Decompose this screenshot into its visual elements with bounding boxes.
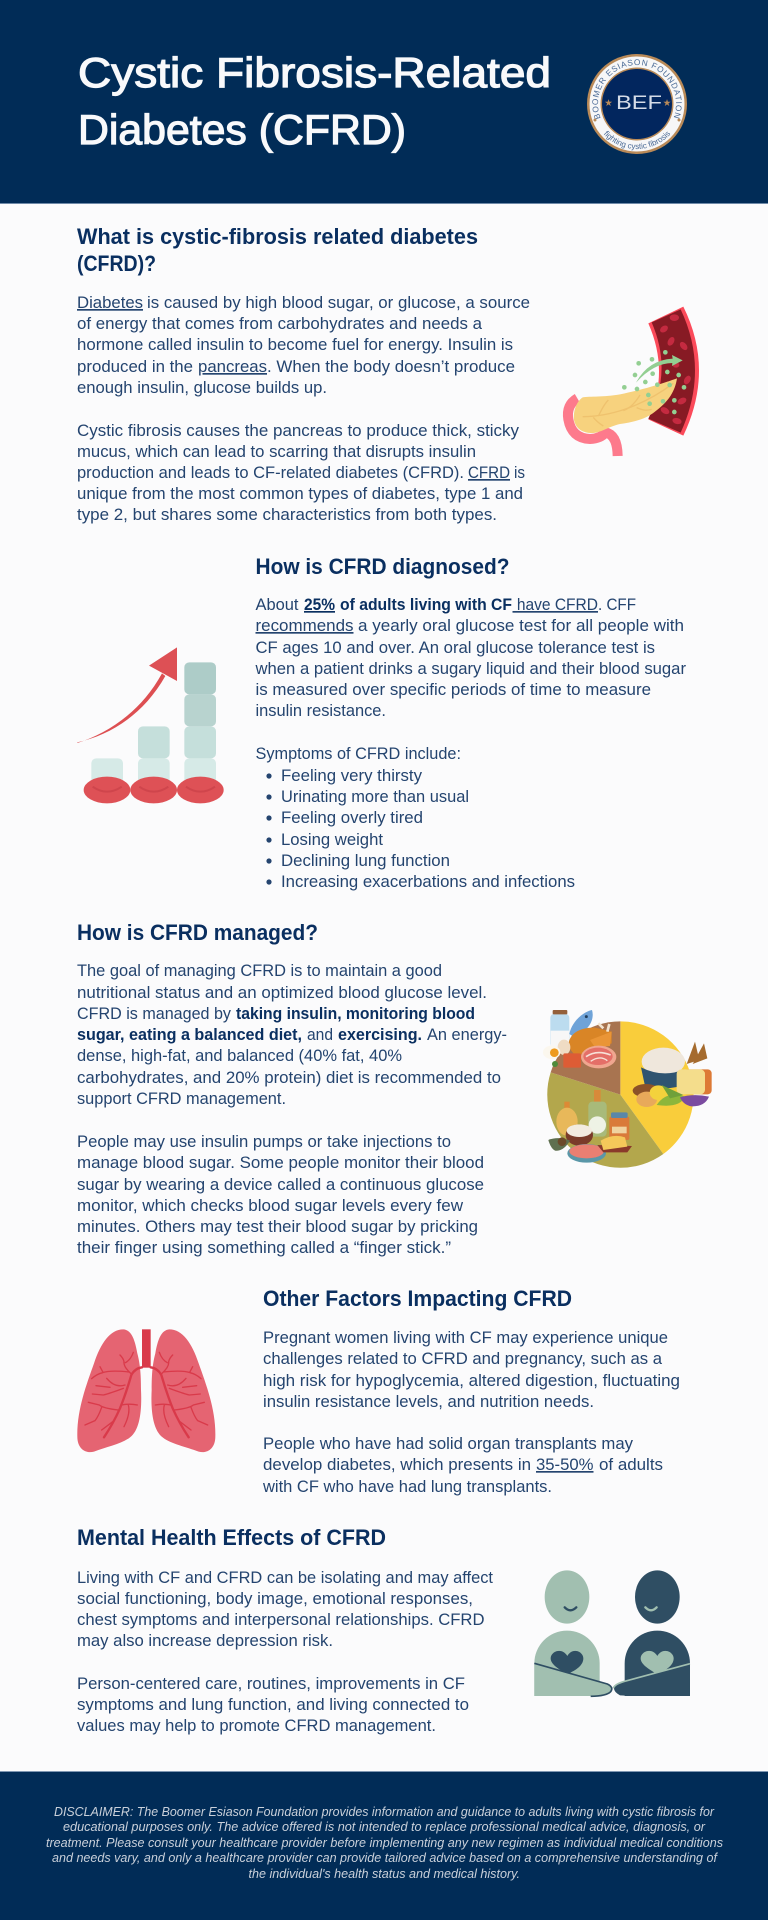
text block: what is diabetes: enough insulin, glucose builds up. [77, 378, 327, 397]
text block: managing CFRD: exercising. [338, 1025, 422, 1044]
title: Cystic Fibrosis-Related [78, 49, 551, 96]
heading: what is CFRD [77, 224, 478, 276]
list: symptoms of CFRD: Symptoms of CFRD include: [256, 744, 461, 763]
text block: person-centered care: symptoms and lung function, and living connected to [77, 1695, 469, 1714]
text block: monitoring blood sugar: minutes. Others may test their blood sugar by pricking [77, 1217, 478, 1236]
logo: Boomer Esiason Foundation: ★ [663, 98, 672, 109]
text block: cystic fibrosis and pancreas: unique from the most common types of diabetes, type 1 and [77, 484, 523, 503]
list: symptoms of CFRD: Increasing exacerbations and infections [281, 872, 575, 891]
text block: living with CF and CFRD [77, 1568, 493, 1650]
disclaimer text: the individual's health status and medical history. [248, 1866, 520, 1881]
text block: what is diabetes: . When the body doesn’t produce [267, 357, 515, 376]
text block: managing CFRD: carbohydrates, and 20% protein) diet is recommended to [77, 1068, 501, 1087]
list: symptoms of CFRD: Losing weight [281, 830, 383, 849]
text block: managing CFRD: nutritional status and an optimized blood glucose level. [77, 983, 487, 1002]
text block: pregnancy: high risk for hypoglycemia, altered digestion, fluctuating [263, 1371, 680, 1390]
text block: cystic fibrosis and pancreas: mucus, which can lead to scarring that disrupts insulin [77, 442, 476, 461]
icon: two people with hearts [534, 1570, 690, 1696]
list: symptoms of CFRD: Feeling overly tired [281, 808, 423, 827]
text block: cystic fibrosis and pancreas: type 2, but shares some characteristics from both types. [77, 505, 497, 524]
text block: what is diabetes: produced in the [77, 357, 193, 376]
text block: diagnosis: 25% [304, 595, 335, 614]
icon: balanced diet pie chart with foods [543, 1010, 712, 1168]
text block: managing CFRD: dense, high-fat, and balanced (40% fat, 40% [77, 1046, 402, 1065]
text block: monitoring blood sugar: sugar by wearing a device called a continuous glucose [77, 1175, 484, 1194]
text block: living with CF and CFRD: social functioning, body image, emotional responses, [77, 1589, 473, 1608]
foods: carbohydrate wedge [633, 1042, 712, 1107]
list: symptoms of CFRD: Feeling very thirsty [281, 766, 423, 785]
heading: how is CFRD managed: How is CFRD managed? [77, 920, 318, 945]
text block: diagnosis: a yearly oral glucose test for all people with [358, 616, 684, 635]
text block: managing CFRD: The goal of managing CFRD is to maintain a good [77, 961, 442, 980]
text block: cystic fibrosis and pancreas [77, 421, 525, 524]
text block: cystic fibrosis and pancreas: production and leads to CF-related diabetes (CFRD). [77, 463, 464, 482]
icon: lungs [77, 1329, 215, 1452]
text block: managing CFRD: sugar, eating a balanced diet, [77, 1025, 302, 1044]
disclaimer text: educational purposes only. The advice offered is not intended to replace professional medical advice, diagnosis, or [63, 1819, 706, 1834]
logo: Boomer Esiason Foundation: BEF [616, 93, 662, 114]
text block: what is diabetes: hormone called insulin to become fuel for energy. Insulin is [77, 335, 513, 354]
text block: diagnosis: . CFF [598, 595, 636, 614]
text block: diagnosis: recommends [256, 616, 354, 635]
text block: transplants [262, 1434, 663, 1496]
title [78, 49, 551, 153]
text block: pregnancy [263, 1328, 680, 1411]
icon: rising blood sugar chart [77, 647, 224, 803]
text block: person-centered care [77, 1674, 469, 1735]
text block: living with CF and CFRD: may also increase depression risk. [77, 1631, 333, 1650]
text block: pregnancy: challenges related to CFRD and pregnancy, such as a [263, 1349, 663, 1368]
heading: how is CFRD diagnosed: How is CFRD diagnosed? [256, 554, 510, 579]
text block: monitoring blood sugar: manage blood sugar. Some people monitor their blood [77, 1153, 484, 1172]
text block: living with CF and CFRD: chest symptoms and interpersonal relationships. CFRD [77, 1610, 484, 1629]
text block: diagnosis: have CFRD [512, 595, 598, 614]
icon: pancreas and blood vessel [568, 307, 699, 456]
text block: what is diabetes: pancreas [198, 357, 267, 376]
text block: what is diabetes [77, 293, 530, 397]
text block: diagnosis: About [256, 595, 299, 614]
foods: protein wedge [543, 1010, 616, 1068]
heading: what is CFRD: What is cystic-fibrosis related diabetes [77, 224, 478, 249]
text block: managing CFRD: An energy- [427, 1025, 507, 1044]
text block: what is diabetes: of energy that comes from carbohydrates and needs a [77, 314, 483, 333]
list: symptoms of CFRD [256, 744, 575, 891]
disclaimer text: and needs vary, and only a healthcare provider can provide tailored advice based on a comprehensive understanding of [52, 1850, 718, 1865]
text block: managing CFRD [77, 961, 507, 1108]
text block: monitoring blood sugar [77, 1132, 484, 1257]
logo: Boomer Esiason Foundation [587, 54, 687, 154]
foods: fat wedge [548, 1090, 632, 1163]
logo: Boomer Esiason Foundation: ★ [604, 98, 613, 109]
text block: monitoring blood sugar: their finger using something called a “finger stick.” [77, 1238, 451, 1257]
list: symptoms of CFRD: Declining lung function [281, 851, 450, 870]
text block: cystic fibrosis and pancreas: is [514, 463, 525, 482]
disclaimer text [46, 1804, 723, 1881]
text block: diagnosis: CF ages 10 and over. An oral glucose tolerance test is [256, 638, 655, 657]
text block: person-centered care: values may help to promote CFRD management. [77, 1716, 436, 1735]
text block: monitoring blood sugar: monitor, which checks blood sugar levels every few [77, 1196, 464, 1215]
disclaimer text: treatment. Please consult your healthcare provider before implementing any new regimen as individual medical conditions [46, 1835, 723, 1850]
heading: what is CFRD: (CFRD)? [77, 251, 156, 276]
text block: managing CFRD: CFRD is managed by [77, 1004, 232, 1023]
disclaimer text: DISCLAIMER: The Boomer Esiason Foundation provides information and guidance to adults living with cystic fibrosis for [54, 1804, 715, 1819]
title: Diabetes (CFRD) [78, 106, 406, 153]
text block: pregnancy: Pregnant women living with CF may experience unique [263, 1328, 668, 1347]
text block: diagnosis: is measured over specific periods of time to measure [256, 680, 651, 699]
header band [0, 0, 768, 204]
text block: pregnancy: insulin resistance levels, and nutrition needs. [263, 1392, 594, 1411]
text block: transplants: with CF who have had lung transplants. [262, 1477, 552, 1496]
text block: cystic fibrosis and pancreas: CFRD [468, 463, 510, 482]
text block: person-centered care: Person-centered care, routines, improvements in CF [77, 1674, 465, 1693]
text block: what is diabetes: is caused by high blood sugar, or glucose, a source [147, 293, 530, 312]
text block: managing CFRD: support CFRD management. [77, 1089, 286, 1108]
text block: transplants: develop diabetes, which presents in [263, 1455, 531, 1474]
list: symptoms of CFRD: Urinating more than usual [281, 787, 469, 806]
text block: cystic fibrosis and pancreas: Cystic fibrosis causes the pancreas to produce thick, sticky [77, 421, 520, 440]
logo: Boomer Esiason Foundation: fighting cystic fibrosis [604, 130, 670, 150]
text block: diagnosis [255, 595, 686, 720]
text block: transplants: of adults [599, 1455, 663, 1474]
logo: Boomer Esiason Foundation: BOOMER ESIASON FOUNDATION [592, 59, 682, 119]
text block: transplants: 35-50% [536, 1455, 594, 1474]
footer band [0, 1771, 768, 1920]
heading: mental health effects: Mental Health Effects of CFRD [77, 1525, 386, 1550]
heading: other factors: Other Factors Impacting CFRD [263, 1286, 572, 1311]
text block: diagnosis: insulin resistance. [256, 701, 386, 720]
text block: diagnosis: of adults living with CF [340, 595, 512, 614]
text block: managing CFRD: taking insulin, monitoring blood [236, 1004, 475, 1023]
text block: diagnosis: when a patient drinks a sugary liquid and their blood sugar [255, 659, 686, 678]
text block: monitoring blood sugar: People may use insulin pumps or take injections to [77, 1132, 451, 1151]
text block: what is diabetes: Diabetes [77, 293, 143, 312]
text block: living with CF and CFRD: Living with CF and CFRD can be isolating and may affect [77, 1568, 493, 1587]
text block: managing CFRD: and [307, 1025, 333, 1044]
text block: transplants: People who have had solid organ transplants may [263, 1434, 634, 1453]
